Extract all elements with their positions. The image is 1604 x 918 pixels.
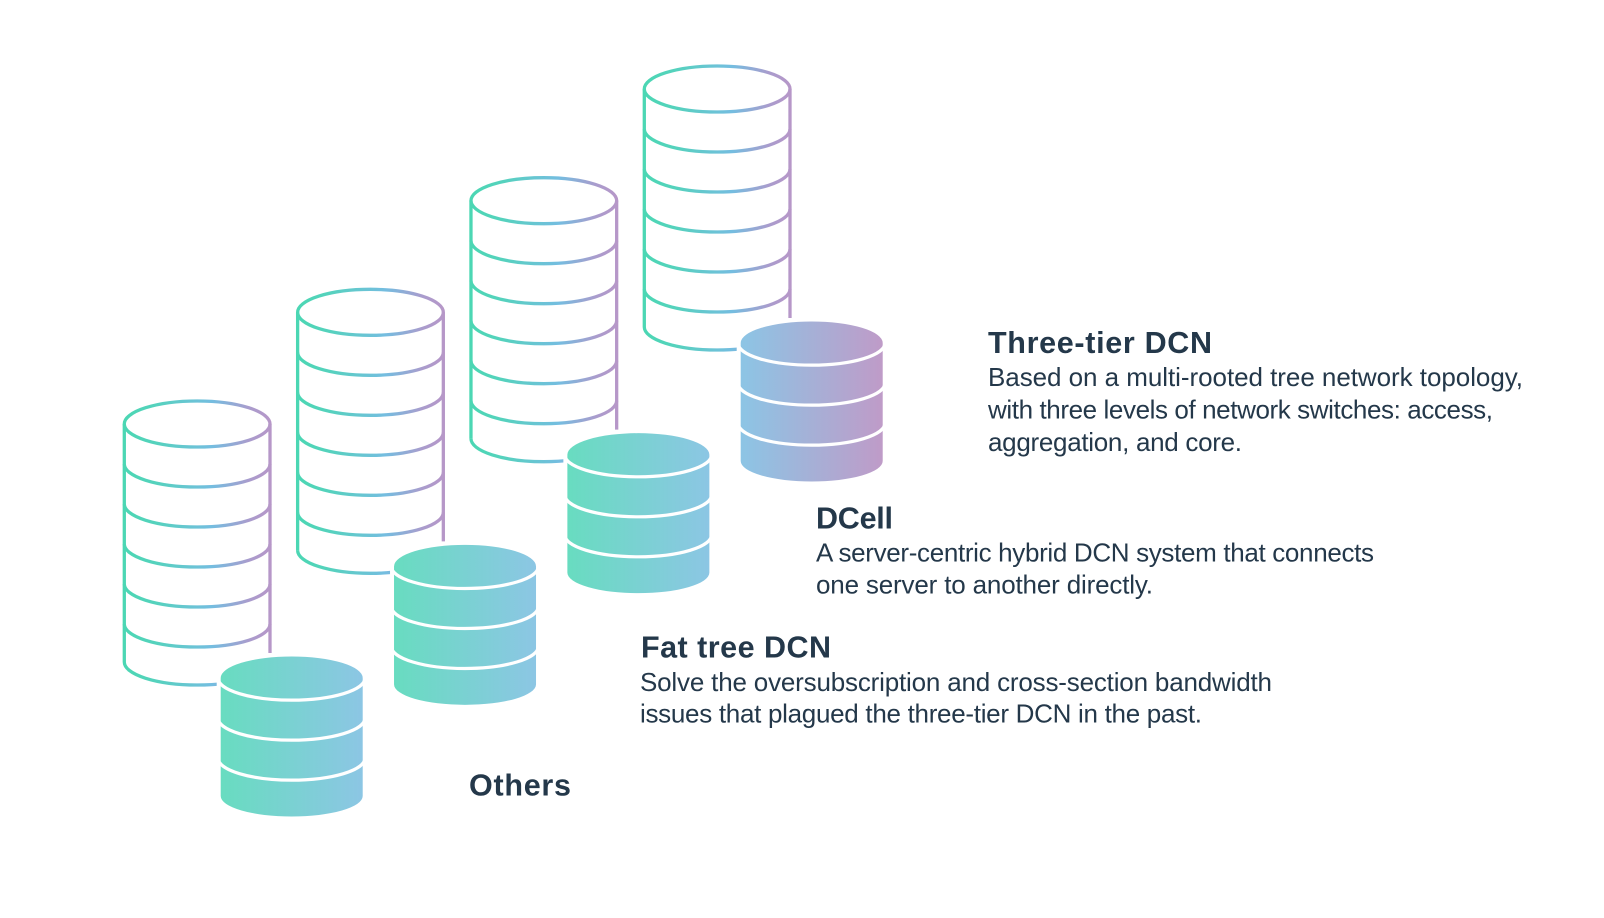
icon: Three-tier filled cylinder xyxy=(738,322,885,482)
stack: Fat tree outline cylinder xyxy=(298,289,443,573)
heading: Others: Others xyxy=(469,768,571,802)
icon: Fat tree filled cylinder xyxy=(391,545,538,705)
description: Fat tree DCN xyxy=(640,667,1272,728)
heading: Three-tier DCN: Three-tier DCN xyxy=(988,326,1212,360)
description: Three-tier DCN: aggregation, and core. xyxy=(988,427,1242,457)
text block: DCell xyxy=(816,502,1374,600)
text block: Fat tree DCN xyxy=(640,630,1272,728)
description: Three-tier DCN: with three levels of network switches: access, xyxy=(987,394,1493,424)
stack: DCell outline cylinder xyxy=(471,178,617,462)
text block: Three-tier DCN xyxy=(987,326,1523,457)
heading: DCell: DCell xyxy=(816,502,893,536)
description: Three-tier DCN: Based on a multi-rooted tree network topology, xyxy=(988,362,1523,392)
description: Fat tree DCN: Solve the oversubscription and cross-section bandwidth xyxy=(640,667,1272,697)
stack: Others outline cylinder xyxy=(124,401,270,685)
description: Fat tree DCN: issues that plagued the three-tier DCN in the past. xyxy=(640,698,1202,728)
description: Three-tier DCN xyxy=(987,362,1523,457)
icon: DCell filled cylinder xyxy=(565,433,712,593)
stack: Three-tier outline cylinder xyxy=(644,66,790,350)
description: DCell: one server to another directly. xyxy=(816,570,1153,600)
icon: Others filled cylinder xyxy=(218,656,365,816)
description: DCell xyxy=(816,538,1374,600)
description: DCell: A server-centric hybrid DCN system that connects xyxy=(816,538,1374,568)
heading: Fat tree DCN: Fat tree DCN xyxy=(641,630,831,664)
